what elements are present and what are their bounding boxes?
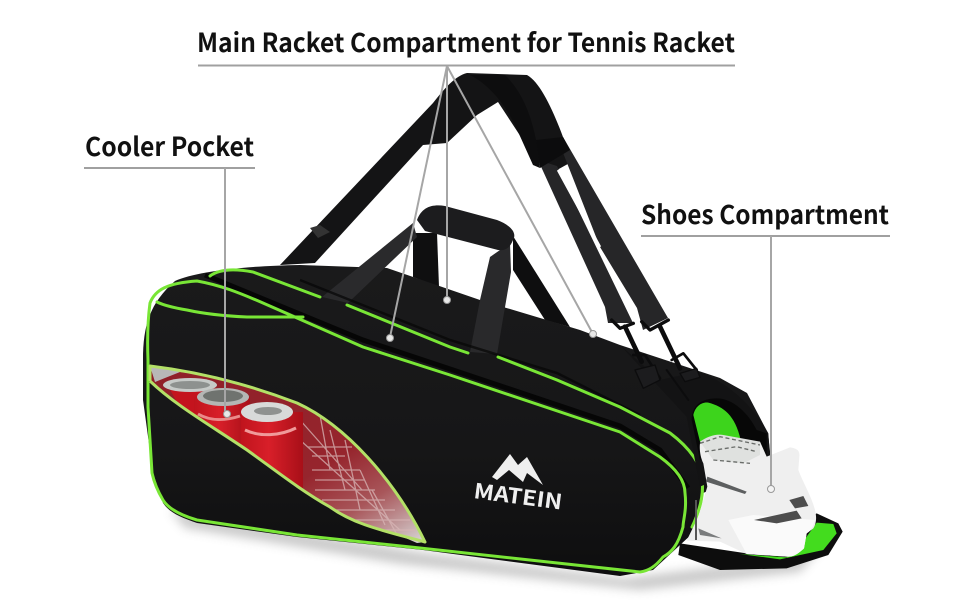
strap clips bbox=[612, 320, 700, 400]
heading: main racket compartment: Main Racket Compartment for Tennis Racket bbox=[197, 23, 735, 60]
carry handle back bbox=[413, 233, 570, 327]
front panel zipper end bbox=[693, 500, 699, 540]
ground shadow bbox=[170, 510, 835, 590]
open end panel bbox=[620, 345, 770, 487]
green lining bbox=[693, 403, 741, 442]
leader lines: main racket compartment bbox=[198, 66, 735, 342]
carry handle front bbox=[322, 205, 514, 354]
zipper bands bbox=[205, 275, 688, 488]
heading: shoes compartment: Shoes Compartment bbox=[641, 195, 889, 232]
leader line: cooler pocket bbox=[84, 168, 255, 418]
cooler pocket bbox=[150, 366, 425, 543]
brand logo bbox=[472, 454, 564, 517]
shoe compartment bbox=[620, 345, 843, 570]
pocket zipper trim bbox=[150, 366, 425, 542]
green piping bbox=[148, 270, 703, 572]
logo wordmark: MATEIN bbox=[472, 475, 564, 517]
label: shoes compartment bbox=[641, 195, 890, 492]
logo mountain mark bbox=[492, 454, 543, 485]
leader line: shoes compartment bbox=[641, 236, 890, 492]
label: cooler pocket bbox=[84, 127, 255, 418]
shoulder strap bbox=[280, 73, 668, 330]
label: main racket compartment bbox=[197, 23, 735, 342]
infographic: bag compartments bbox=[84, 31, 890, 594]
sneaker bbox=[687, 442, 816, 557]
pocket lining bbox=[150, 366, 425, 543]
heading: cooler pocket: Cooler Pocket bbox=[85, 127, 254, 164]
foil and cans bbox=[150, 366, 415, 540]
bag body bbox=[143, 265, 772, 576]
shoe laces bbox=[700, 437, 760, 463]
bottom flap bbox=[678, 513, 843, 570]
